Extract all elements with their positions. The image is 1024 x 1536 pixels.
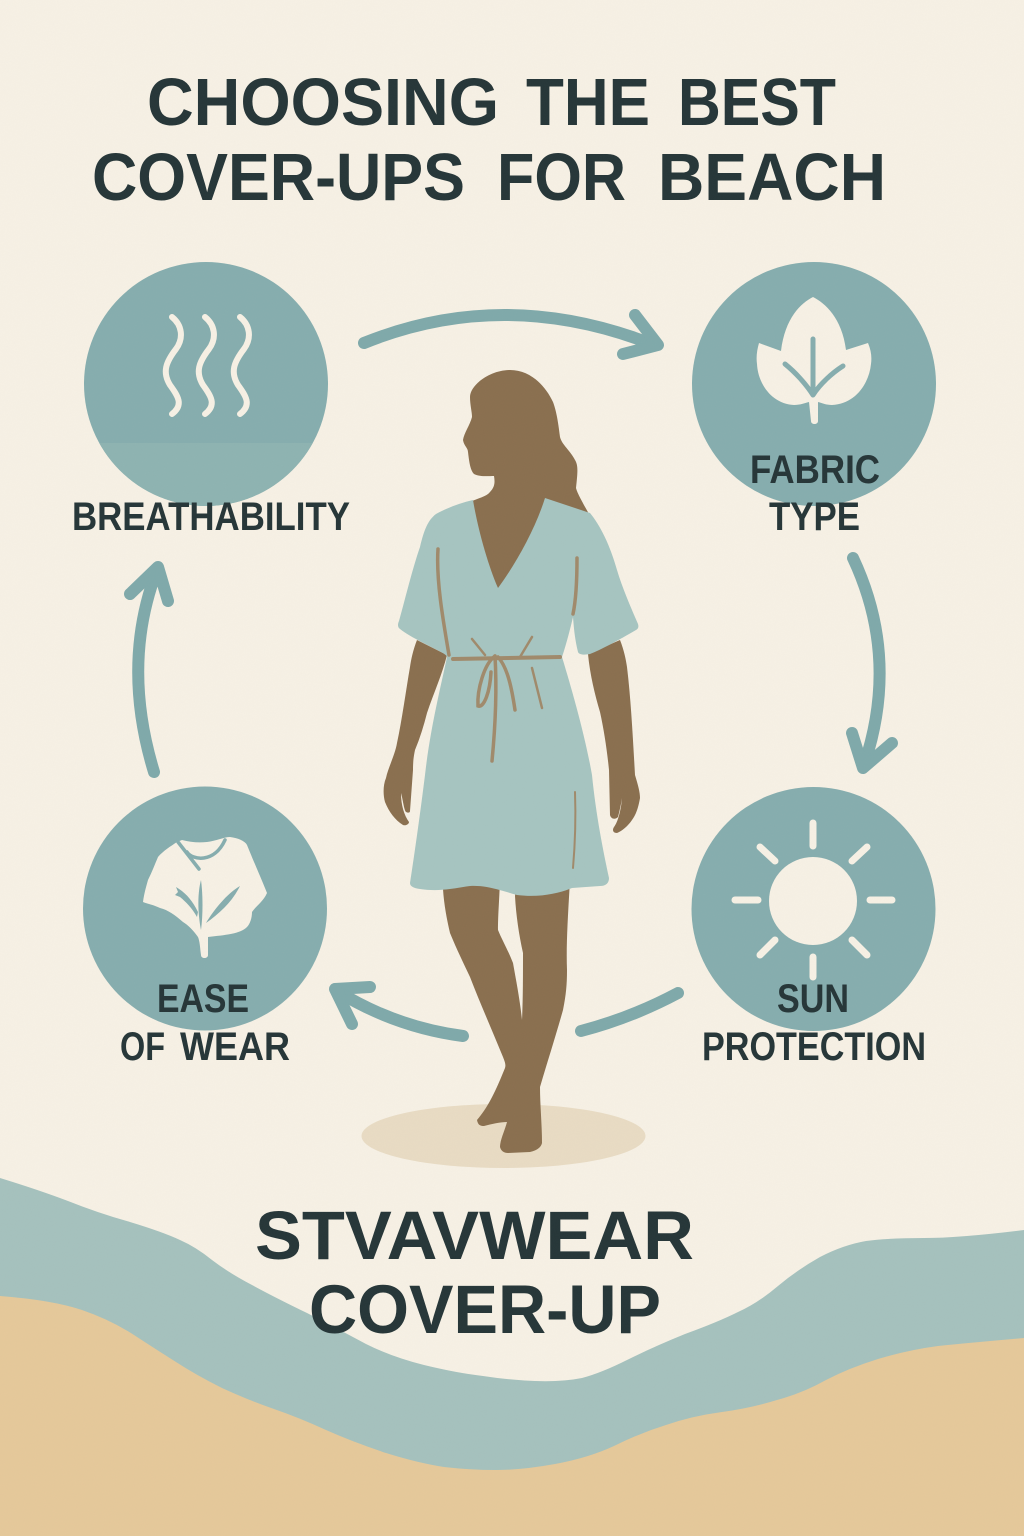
sand xyxy=(0,1296,1024,1536)
figure: woman in cover-up xyxy=(362,370,646,1168)
arrow: sun protection to ease of wear xyxy=(581,993,678,1031)
label: ease of wear xyxy=(120,977,290,1069)
title: CHOOSING xyxy=(147,65,499,140)
label: sun protection: SUN xyxy=(777,977,849,1021)
title: BEACH xyxy=(658,140,886,215)
title: BEST xyxy=(678,65,836,140)
panel: sun protection xyxy=(692,787,936,1069)
beach wave xyxy=(0,1178,1024,1536)
title xyxy=(92,65,886,215)
product name: STVAVWEAR xyxy=(255,1197,694,1274)
label: fabric type: TYPE xyxy=(769,495,860,539)
icon: leaf xyxy=(757,297,871,424)
panel: breathability xyxy=(72,262,350,539)
panel: ease of wear xyxy=(83,786,327,1069)
product name: COVER-UP xyxy=(309,1271,661,1348)
label: breathability: BREATHABILITY xyxy=(72,495,350,539)
label: ease of wear: OF xyxy=(120,1025,165,1069)
left arm xyxy=(384,640,447,825)
panel: fabric type xyxy=(692,262,936,539)
right arm xyxy=(588,640,640,833)
arrow: ease of wear toward left xyxy=(335,987,463,1036)
label: sun protection xyxy=(702,977,926,1069)
arrow: breathability to fabric type xyxy=(364,315,658,354)
icon: air waves xyxy=(166,317,249,414)
arrow: fabric type to sun protection xyxy=(852,558,892,768)
title: COVER-UPS xyxy=(92,140,465,215)
label: ease of wear: WEAR xyxy=(180,1025,290,1069)
legs xyxy=(443,880,570,1153)
arrow: left side upward xyxy=(130,567,168,772)
dress belt and seams xyxy=(438,549,577,868)
sand shadow xyxy=(362,1104,646,1168)
label: fabric type xyxy=(750,448,880,539)
title: THE xyxy=(526,65,650,140)
icon: garment leaf xyxy=(143,837,267,958)
label: fabric type: FABRIC xyxy=(750,448,880,492)
product name xyxy=(255,1197,694,1348)
title: FOR xyxy=(497,140,626,215)
hair, head and neck xyxy=(463,370,589,600)
dress xyxy=(398,498,638,896)
label: sun protection: PROTECTION xyxy=(702,1025,926,1069)
label: ease of wear: EASE xyxy=(157,977,249,1021)
icon: sun xyxy=(735,823,892,977)
